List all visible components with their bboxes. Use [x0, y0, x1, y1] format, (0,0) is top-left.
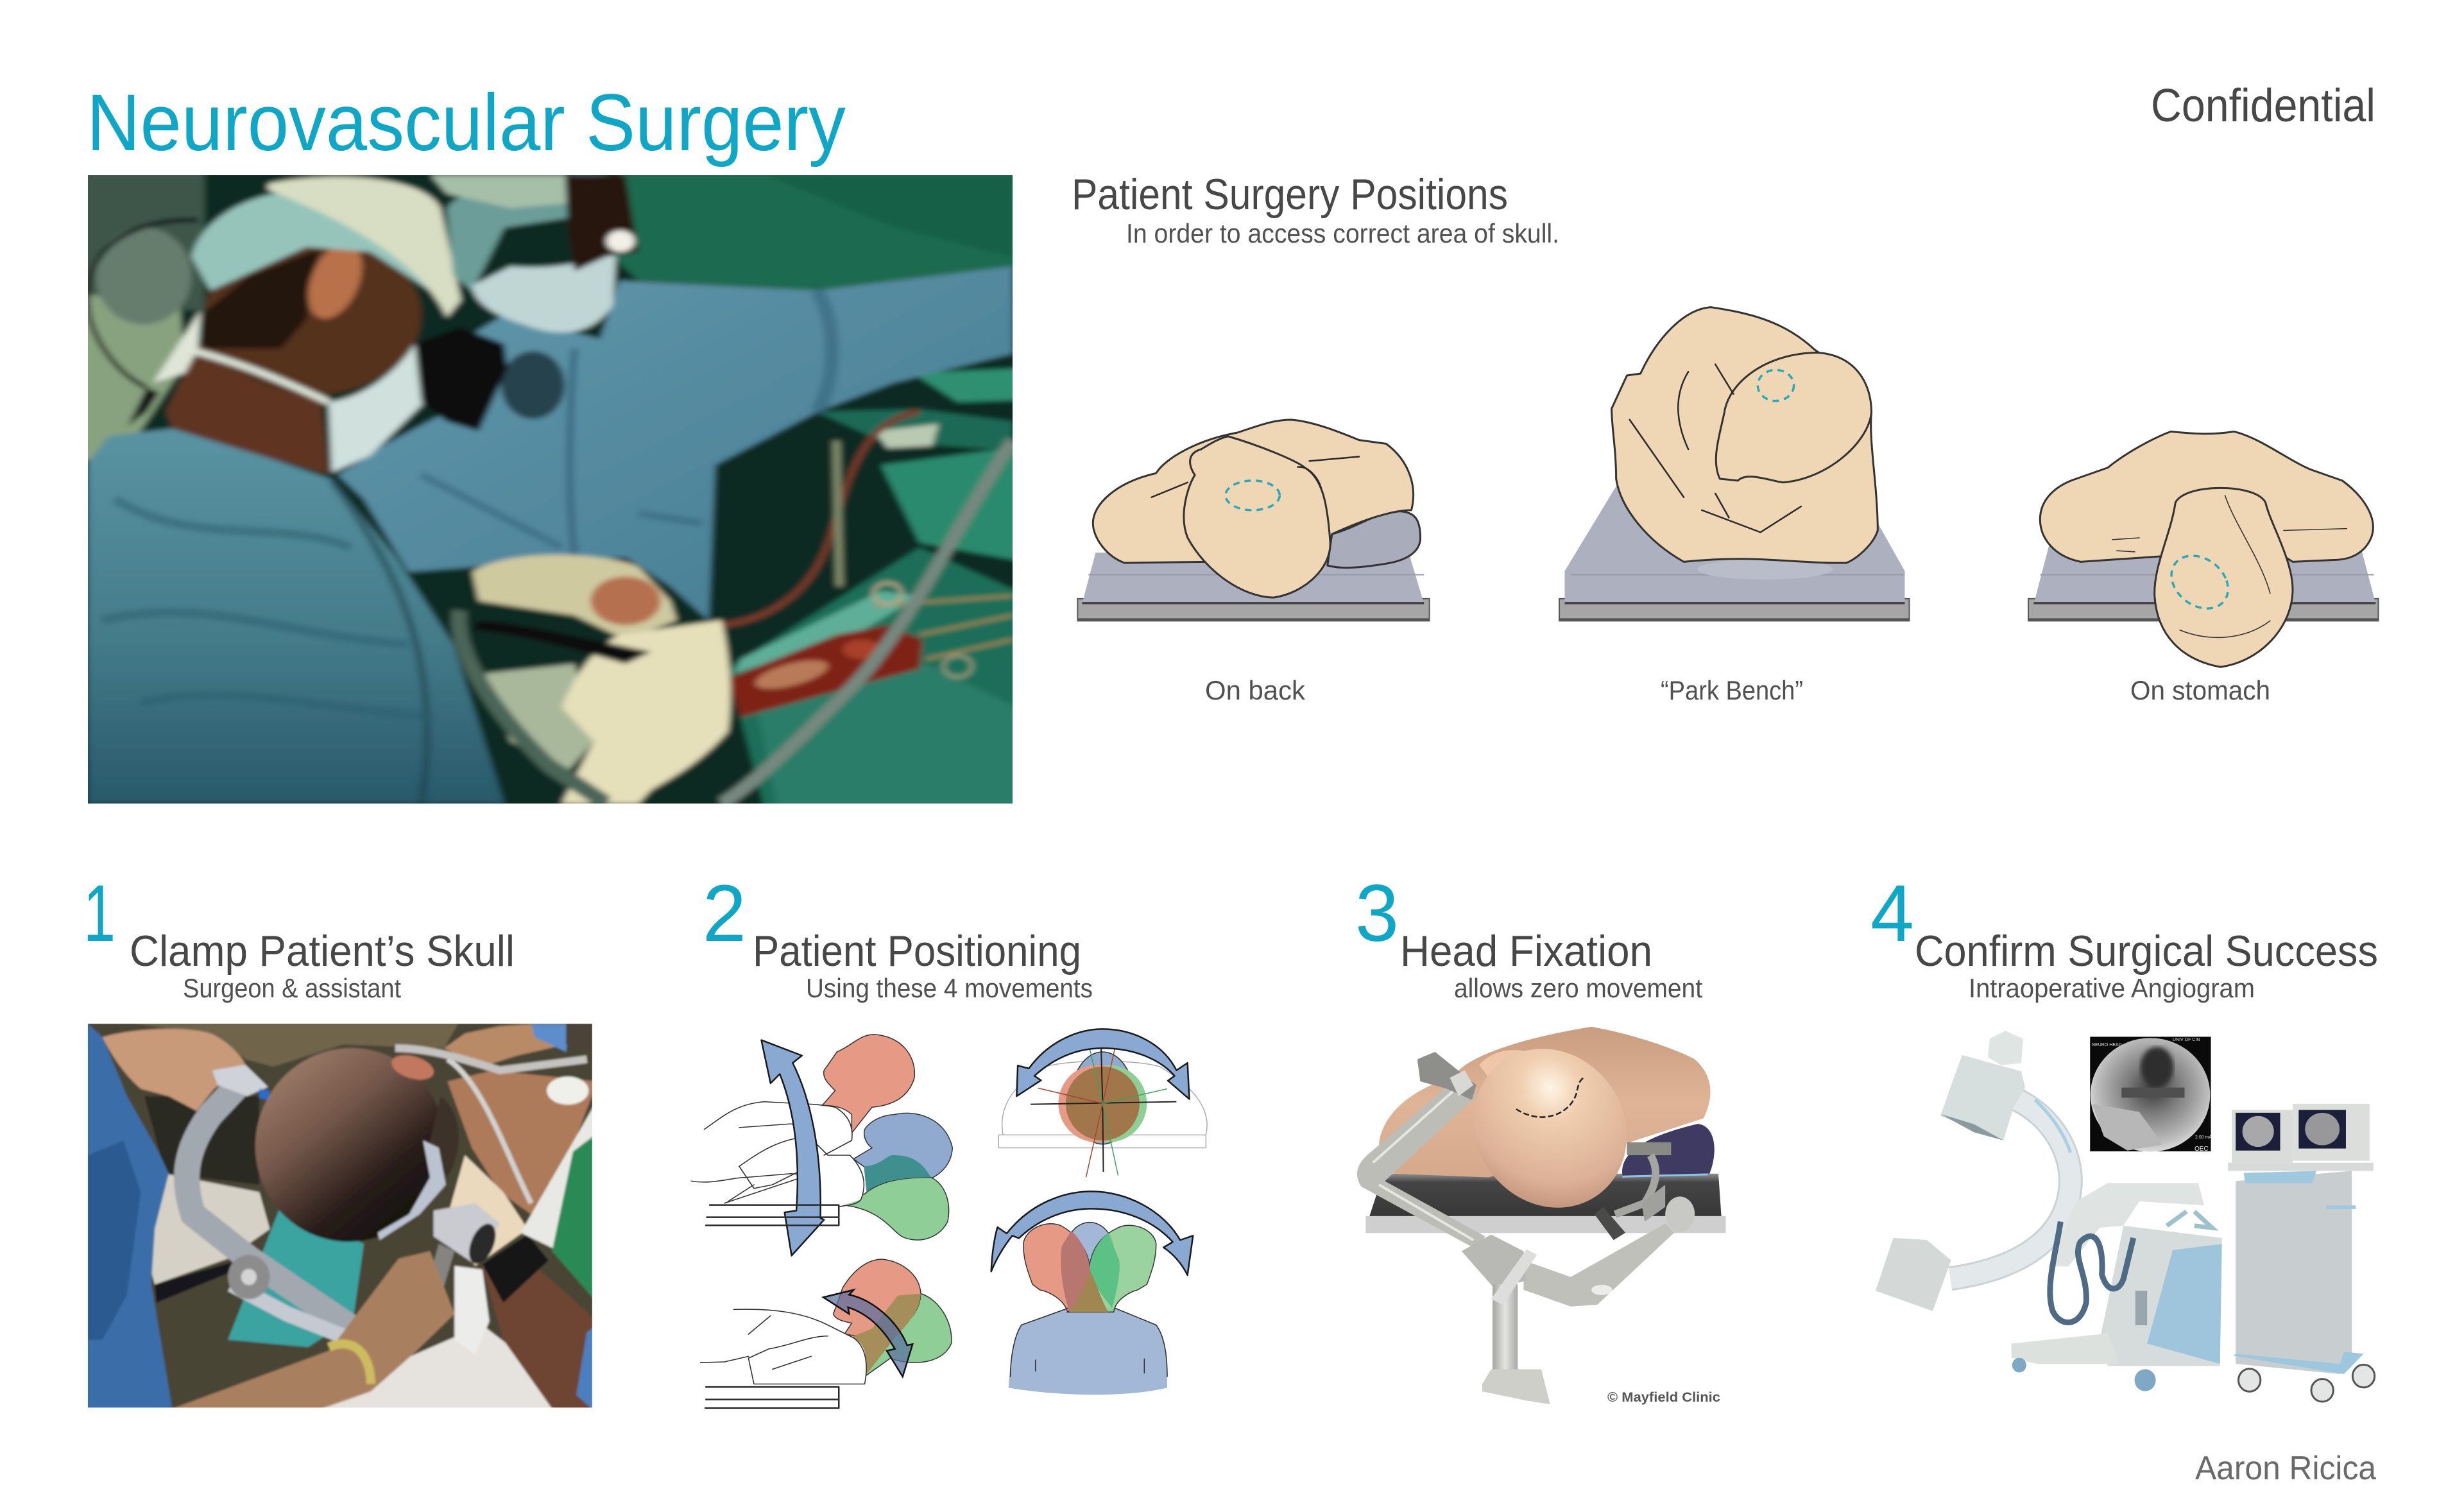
illustration: c-arm angiography machine: [1876, 1031, 2375, 1402]
subheading: access area: In order to access correct area of skull.: [1126, 218, 1559, 248]
author credit: Aaron Ricica: [2195, 1450, 2376, 1487]
step 3 heading: Head Fixation: [1400, 927, 1652, 976]
illustration: head fixation frame: [1357, 1027, 1726, 1404]
angiogram annotations: NEURO HEAD: [2092, 1043, 2122, 1047]
step 4 subheading: Intraoperative Angiogram: [1969, 973, 2255, 1003]
illustration: head rotation from above: [998, 1029, 1207, 1177]
photo: clamping the skull: [81, 1019, 597, 1413]
angiogram annotations: 2.00 mA: [2195, 1135, 2212, 1140]
illustration: neck flexion and extension: [691, 1035, 952, 1255]
copyright: mayfield clinic: © Mayfield Clinic: [1607, 1390, 1720, 1405]
step 1 number: 1: [83, 869, 116, 958]
photo: surgeons operating: [76, 164, 1028, 814]
angiogram annotations: OEC: [2194, 1146, 2209, 1153]
illustration: head turn from behind: [991, 1191, 1193, 1395]
confidential label: Confidential: [2151, 80, 2375, 132]
step 1 subheading: Surgeon & assistant: [183, 973, 401, 1003]
step 2 number: 2: [703, 869, 746, 958]
step 2 heading: Patient Positioning: [753, 927, 1081, 976]
heading: patient surgery positions: Patient Surgery Positions: [1072, 170, 1508, 219]
step 3 number: 3: [1355, 869, 1399, 958]
figure: on stomach position: [2028, 431, 2379, 667]
caption: on stomach: On stomach: [2130, 675, 2270, 705]
step 2 subheading: Using these 4 movements: [806, 973, 1093, 1003]
caption: on back: On back: [1205, 675, 1306, 705]
angiogram annotations: UNIV OF CIN: [2173, 1038, 2200, 1042]
caption: park bench: “Park Bench”: [1661, 675, 1803, 705]
figure: park bench position: [1559, 307, 1910, 621]
step 4 number: 4: [1870, 869, 1914, 958]
title: Neurovascular Surgery: [87, 78, 846, 168]
step 3 subheading: allows zero movement: [1454, 973, 1702, 1003]
illustration: chin tuck and extension: [701, 1259, 952, 1408]
angiogram annotations: [2092, 1038, 2212, 1153]
figure: on back position: [1077, 420, 1430, 621]
step 1 heading: Clamp Patient’s Skull: [130, 927, 515, 976]
step 4 heading: Confirm Surgical Success: [1915, 927, 2378, 976]
